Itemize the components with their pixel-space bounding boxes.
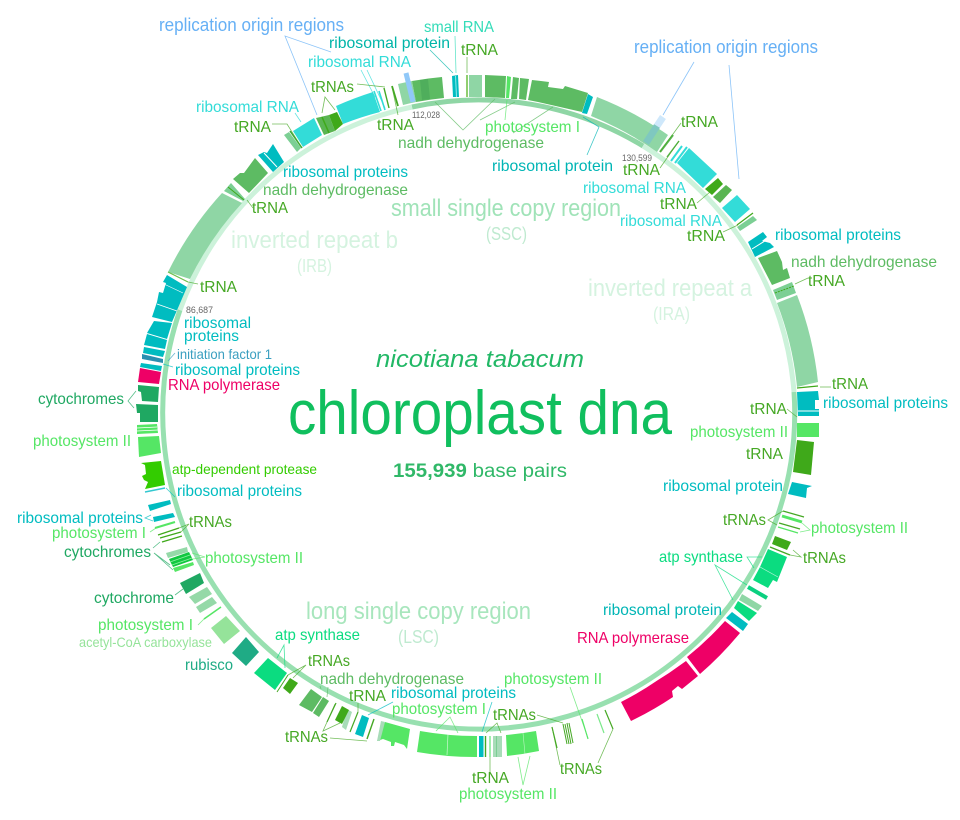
label: photosystem II inner right: photosystem II (690, 424, 788, 441)
label: ribosomal proteins right: ribosomal proteins (775, 227, 901, 244)
label: tRNAs inner right: tRNAs (723, 512, 766, 529)
gene: tRNA second block (713, 185, 732, 203)
label: tRNA under 130,599 (623, 141, 679, 179)
base pair count: 155,939 base pairs (393, 461, 567, 482)
label: tRNAs bottom center (486, 707, 563, 733)
label: tRNAs lower left: tRNAs (308, 653, 350, 670)
label: small RNA: small RNA (424, 19, 494, 36)
gene: ribosomal protein block (788, 482, 812, 498)
label: ribosomal RNA top: ribosomal RNA (308, 54, 411, 71)
region: small single copy: small single copy region (391, 195, 621, 222)
label: photosystem I top: photosystem I (485, 119, 580, 136)
region: small single copy (391, 195, 621, 244)
label: tRNA right 3: tRNA (687, 228, 725, 245)
gene: RNA polymerase left (138, 368, 161, 384)
gene: atp-dependent protease (141, 461, 165, 489)
label: tRNA right 2 (660, 192, 710, 213)
label: ribosomal proteins two lines: ribosomal (184, 315, 251, 332)
gene: tRNA strip IRA (773, 282, 796, 300)
label: photosystem I top (485, 100, 580, 136)
label: nadh dehydrogenase right: nadh dehydrogenase (791, 254, 937, 271)
label: tRNA right top: tRNA (681, 114, 718, 131)
gene: tRNA line (797, 386, 818, 388)
label: tRNA left: tRNA (234, 119, 271, 136)
label: tRNA left (234, 119, 302, 148)
label: ribosomal protein lower right: ribosomal protein (603, 602, 722, 619)
gene: ribosomal protein lower right (726, 612, 748, 631)
gene: atp synthase lower (734, 601, 757, 621)
region: inverted repeat a: (IRA) (653, 304, 690, 324)
label: tRNA top center (377, 87, 414, 134)
gene: photosystem I stepped block (377, 721, 410, 749)
gene: ribosomal protein cyan (582, 94, 593, 114)
gene: small RNA and ribosomal protein (452, 75, 459, 97)
label: photosystem I left: photosystem I (52, 525, 146, 542)
label: ribosomal proteins inner left: ribosomal proteins (177, 483, 302, 500)
region: long single copy: (LSC) (398, 627, 439, 647)
gene: tRNAs pair (316, 112, 343, 135)
gene: nadh dehydrogenase top block (398, 77, 444, 105)
gene: atp synthase lower left (254, 658, 287, 690)
gene: tRNA cluster (563, 723, 573, 744)
gene: bottom right thin lines (552, 710, 613, 748)
gene: tRNA strip in IRB (224, 183, 245, 201)
gene: light block (469, 75, 482, 97)
label: ribosomal proteins two lines (184, 315, 251, 345)
gene: tRNA and repeat strip (284, 131, 302, 152)
label: cytochromes lower left (64, 542, 173, 570)
gene: ribosomal proteins right (748, 232, 774, 257)
gene: tRNA stripes (384, 86, 398, 108)
gene: replication origin stripe (406, 73, 413, 102)
label: ribosomal protein top (329, 35, 453, 73)
gene: RNA polymerase stepped (621, 661, 698, 721)
gene: photosystem II left block (138, 436, 161, 457)
label: ribosomal RNA left: ribosomal RNA (196, 99, 299, 116)
label: nadh dehydrogenase top: nadh dehydrogenase (398, 135, 544, 152)
region: long single copy: long single copy region (306, 598, 531, 625)
gene: nadh bar 2 (519, 78, 529, 100)
label: tRNA bottom left: tRNA (349, 688, 386, 705)
gene: ribosomal RNA (293, 118, 322, 147)
label: tRNA top: tRNA (461, 42, 498, 59)
gene: tRNA dark block lower (275, 673, 298, 694)
title: chloroplast dna (288, 379, 672, 448)
label: replication origin regions left: replication origin regions (159, 15, 344, 35)
label: tRNAs left: tRNAs (189, 514, 232, 531)
gene: ribosomal RNA thin pair (671, 146, 687, 163)
label: ribosomal RNA right 1: ribosomal RNA (583, 180, 686, 197)
label: ribosomal RNA top (308, 54, 411, 108)
gene: ribosomal proteins stepped upper left (152, 275, 187, 322)
label: ribosomal RNA right 2: ribosomal RNA (620, 213, 722, 230)
label: ribosomal proteins bottom: ribosomal proteins (391, 685, 516, 702)
gene: cyan bottom-left bar (355, 715, 369, 737)
position: 86,687: 86,687 (186, 305, 213, 315)
gene: nadh lower block (299, 689, 329, 717)
region: inverted repeat b: inverted repeat b (231, 227, 398, 254)
gene: ribosomal protein bar (140, 363, 162, 371)
gene: ribosomal protein bars upper left (143, 321, 172, 357)
label: photosystem II left: photosystem II (33, 433, 131, 450)
label: tRNAs bottom right: tRNAs (560, 761, 602, 778)
gene: nadh dehydrogenase (233, 158, 268, 193)
gene: tRNA dark lower right (770, 536, 791, 555)
label: cytochromes lower left: cytochromes (64, 544, 151, 561)
gene: ribosomal RNA large (336, 92, 380, 124)
gene: acetyl-CoA carboxylase (211, 616, 240, 644)
label: ribosomal proteins right 2: ribosomal proteins (823, 395, 948, 412)
label: ribosomal proteins left: ribosomal proteins (17, 510, 143, 527)
gene: tRNA block (793, 440, 814, 475)
label: tRNA top center: tRNA (377, 117, 414, 134)
label: photosystem II outer right: photosystem II (811, 520, 908, 537)
label: replication origin regions right (634, 37, 818, 179)
label: tRNA bottom left (349, 688, 386, 712)
genome ring (163, 100, 795, 729)
label: tRNA right 5: tRNA (832, 376, 868, 393)
label: tRNA right top (660, 114, 718, 152)
label: tRNAs bottom left (285, 704, 367, 746)
region: long single copy (306, 598, 531, 647)
gene: light blocks (189, 587, 217, 613)
gene: tRNA line (327, 703, 336, 722)
gene: tRNA strip right (737, 213, 757, 231)
gene: ribosomal proteins bars left (148, 500, 175, 522)
gene: nadh bar 3 and stepped block (528, 80, 588, 112)
gene: initiation factor 1 (142, 354, 163, 363)
gene: photosystem II block (797, 423, 819, 437)
label: tRNA inner right 2: tRNA (746, 446, 783, 463)
label: atp synthase lower left (275, 627, 360, 668)
gene: ribosomal proteins (258, 144, 284, 172)
label: atp synthase lower left: atp synthase (275, 627, 360, 644)
gene: nadh dehydrogenase right (758, 251, 790, 285)
gene: tRNA bottom lines (486, 736, 490, 757)
gene: inverted repeat a top block (591, 97, 668, 152)
label: ribosomal protein center top: ribosomal protein (492, 158, 613, 175)
gene: cytochromes blocks (136, 385, 159, 422)
label: cytochrome: cytochrome (94, 590, 174, 607)
label: tRNA bottom: tRNA (472, 770, 509, 787)
label: tRNA inner right: tRNA (750, 401, 787, 418)
label: initiation factor 1: initiation factor 1 (177, 346, 272, 362)
label: cytochromes left: cytochromes (38, 391, 124, 408)
position: 130,599: 130,599 (622, 153, 652, 163)
gene: photosystem II thin stripes (137, 424, 158, 434)
label: photosystem I bottom (392, 701, 486, 733)
label: tRNA upper left 2: tRNA (200, 279, 237, 296)
gene: rubisco (232, 637, 259, 666)
label: tRNAs lower left (288, 653, 350, 678)
gene: tRNA line (350, 712, 358, 732)
gene: tRNA line (367, 719, 374, 739)
label: nadh dehydrogenase upper left: nadh dehydrogenase (263, 182, 408, 199)
region: inverted repeat b (231, 227, 398, 276)
label: ribosomal proteins bottom (368, 685, 516, 732)
label: ribosomal proteins upper left: ribosomal proteins (283, 164, 408, 181)
label: ribosomal protein inner right: ribosomal protein (663, 478, 783, 495)
gene: photosystem II strips (166, 547, 194, 572)
gene: ribosomal RNA second (722, 195, 750, 222)
gene: light stripes bottom (493, 736, 502, 757)
gene: photosystem I large block (417, 731, 477, 757)
label: photosystem II bottom (459, 756, 557, 803)
label: ribosomal protein top: ribosomal protein (329, 35, 450, 52)
gene: atp synthase bar (748, 587, 767, 598)
gene: RNA polymerase big (687, 621, 740, 674)
gene: tRNA thin upper left (168, 272, 188, 282)
label: nadh dehydrogenase top (398, 99, 553, 152)
label: photosystem I bottom: photosystem I (392, 701, 486, 718)
gene: atp synthase main (753, 549, 787, 588)
gene: ribosomal proteins stepped (797, 391, 819, 416)
label: ribosomal proteins two lines: proteins (184, 328, 239, 345)
gene: tRNA thin pair (660, 135, 679, 157)
label: tRNAs bottom right (552, 727, 613, 778)
label: photosystem II bottom right: photosystem II (504, 671, 602, 688)
label: rubisco: rubisco (185, 657, 233, 674)
label: small RNA (424, 19, 494, 73)
label: nadh dehydrogenase bottom: nadh dehydrogenase (320, 671, 464, 688)
region: inverted repeat a (588, 275, 753, 324)
gene: cytochrome block (180, 573, 204, 594)
position: 112,028: 112,028 (412, 110, 440, 120)
label: atp synthase right (659, 549, 762, 600)
gene: photosystem I line left (155, 522, 175, 528)
gene: nadh bar (511, 77, 519, 99)
label: photosystem II bottom right (504, 671, 602, 738)
label: tRNA right 4: tRNA (808, 273, 845, 290)
label: tRNA right 2: tRNA (660, 196, 697, 213)
label: photosystem I lower left: photosystem I (98, 617, 193, 634)
label: replication origin regions right: replication origin regions (634, 37, 818, 57)
gene: ribosomal RNA right (677, 148, 717, 188)
gene: dark tRNA block (335, 706, 349, 724)
label: tRNA under 130,599: tRNA (623, 162, 660, 179)
gene: photosystem II bottom block (506, 731, 539, 756)
gene: light block lower right (739, 594, 762, 611)
label: atp-dependent protease: atp-dependent protease (172, 461, 317, 477)
label: nadh dehydrogenase bottom (320, 671, 464, 697)
label: RNA polymerase right: RNA polymerase (577, 630, 689, 647)
label: photosystem II bottom: photosystem II (459, 786, 557, 803)
label: RNA polymerase left: RNA polymerase (168, 377, 280, 394)
label: tRNAs outer right: tRNAs (803, 550, 846, 567)
label: tRNA right 3 (687, 225, 738, 245)
gene: photosystem I bar (506, 76, 511, 98)
label: acetyl-CoA carboxylase: acetyl-CoA carboxylase (79, 634, 212, 650)
label: tRNA upper left: tRNA (252, 200, 288, 217)
gene: inverted repeat b block (168, 193, 242, 279)
label: atp synthase right: atp synthase (659, 549, 743, 566)
gene: ribosomal RNA thin stripes (374, 91, 385, 111)
label: tRNAs top: tRNAs (311, 79, 354, 96)
gene: light bar (342, 709, 352, 730)
label: tRNA bottom (472, 757, 509, 787)
gene: nadh blocks top (485, 75, 506, 98)
label: photosystem II lower left: photosystem II (205, 550, 303, 567)
region: small single copy: (SSC) (486, 224, 527, 244)
region: inverted repeat a: inverted repeat a (588, 275, 753, 302)
region: inverted repeat b: (IRB) (297, 256, 332, 276)
gene: inverted repeat a block (777, 295, 818, 387)
label: ribosomal proteins mid left: ribosomal proteins (175, 362, 300, 379)
label: replication origin regions left (159, 15, 344, 115)
label: tRNAs top (311, 79, 385, 113)
gene: cyan bottom bar (479, 736, 484, 757)
label: tRNA top (461, 42, 498, 73)
gene: photosystem I line (204, 607, 221, 619)
label: tRNAs bottom center: tRNAs (493, 707, 536, 724)
gene: tRNA lines left (158, 528, 182, 542)
gene: tRNA and photosystem thin lines (778, 511, 804, 533)
gene: tRNA dark block (705, 178, 723, 195)
gene: ribosomal thin bar (145, 488, 165, 492)
gene: tRNA thin (466, 75, 468, 97)
gene: replication origin stripe right (646, 117, 663, 143)
label: tRNAs bottom left: tRNAs (285, 729, 328, 746)
subtitle: species: nicotiana tabacum (376, 346, 584, 373)
label: ribosomal protein center top (492, 117, 613, 175)
